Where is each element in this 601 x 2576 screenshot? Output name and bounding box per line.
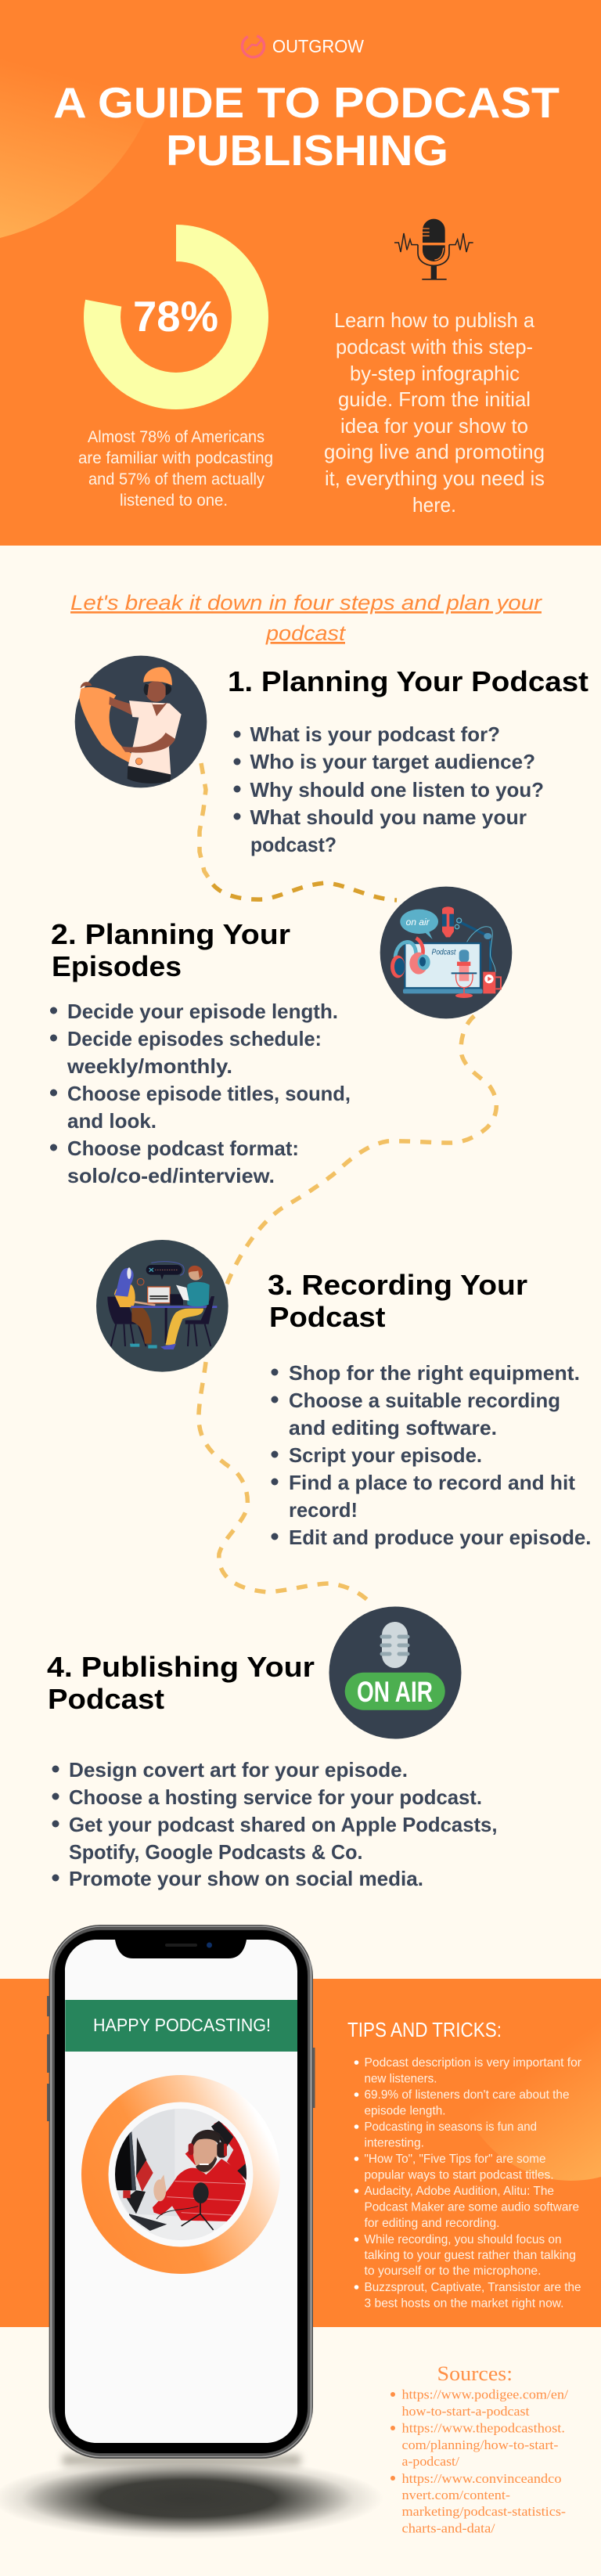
list: tips: Podcast Maker are some audio software bbox=[365, 2201, 579, 2214]
list: sources: how-to-start-a-podcast bbox=[402, 2404, 530, 2419]
list: tips: Podcasting in seasons is fun and bbox=[365, 2120, 537, 2134]
list: step 2: Choose episode titles, sound, bbox=[67, 1082, 351, 1105]
heading: step 4: Podcast bbox=[48, 1683, 164, 1715]
banner: happy podcasting: HAPPY PODCASTING! bbox=[93, 2015, 271, 2035]
banner: happy podcasting bbox=[65, 2000, 297, 2052]
donut caption: listened to one. bbox=[120, 492, 228, 510]
list: step 2: weekly/monthly. bbox=[67, 1054, 232, 1078]
logo: Outgrow: OUTGROW bbox=[272, 36, 364, 56]
list: step 4 bbox=[52, 1758, 498, 1890]
list: step 3 bbox=[271, 1361, 592, 1549]
list: sources: nvert.com/content- bbox=[402, 2488, 510, 2502]
title: PUBLISHING bbox=[166, 126, 448, 175]
list: step 2: and look. bbox=[67, 1109, 157, 1133]
heading: step 1: 1. Planning Your Podcast bbox=[228, 665, 588, 697]
donut caption: are familiar with podcasting bbox=[78, 449, 273, 467]
list: step 3: Shop for the right equipment. bbox=[289, 1361, 580, 1385]
heading: sources: Sources: bbox=[437, 2362, 513, 2385]
donut chart: 78% bbox=[102, 243, 250, 391]
list: step 3: Choose a suitable recording bbox=[289, 1389, 560, 1412]
list: tips: episode length. bbox=[365, 2104, 446, 2118]
heading: step 2: Episodes bbox=[52, 950, 182, 982]
list: step 4: Design covert art for your episode. bbox=[69, 1758, 408, 1782]
list: sources: marketing/podcast-statistics- bbox=[402, 2504, 566, 2519]
title bbox=[53, 78, 560, 175]
intro text: here. bbox=[412, 493, 456, 517]
heading: step 3: Podcast bbox=[269, 1301, 386, 1333]
panel: step 1 bbox=[75, 656, 588, 856]
heading: step 4: 4. Publishing Your bbox=[47, 1651, 315, 1683]
list: tips: "How To", "Five Tips for" are some bbox=[365, 2153, 546, 2166]
icon: microphone with sound waves bbox=[394, 219, 473, 280]
list: tips: While recording, you should focus on bbox=[365, 2233, 562, 2246]
logo: Outgrow bbox=[239, 32, 364, 60]
icon: podcast studio laptop: Podcast bbox=[432, 948, 456, 957]
icon: two people recording bbox=[96, 1240, 229, 1372]
list: step 1: podcast? bbox=[250, 833, 336, 856]
list: step 4: Choose a hosting service for your podcast. bbox=[69, 1785, 482, 1809]
panel: step 4 bbox=[47, 1606, 498, 1890]
list: step 1: Who is your target audience? bbox=[250, 750, 535, 773]
list: tips: for editing and recording. bbox=[365, 2217, 499, 2230]
list: step 3: and editing software. bbox=[289, 1416, 497, 1439]
list: step 2 bbox=[50, 1000, 351, 1187]
list: step 1: What should you name your bbox=[250, 805, 527, 829]
heading: step 2 bbox=[51, 918, 290, 982]
heading: tips and tricks: TIPS AND TRICKS: bbox=[347, 2018, 502, 2041]
icon: on air microphone: ON AIR bbox=[357, 1676, 433, 1708]
icon: podcast studio laptop bbox=[380, 887, 512, 1018]
list: tips: Audacity, Adobe Audition, Alitu: The bbox=[365, 2185, 554, 2198]
heading: step 2: 2. Planning Your bbox=[51, 918, 290, 950]
arrow: dashed path from step 1 to step 2 bbox=[200, 763, 397, 900]
donut chart: 78%: 78% bbox=[133, 292, 218, 340]
arrow: dashed path from step 2 to step 3 bbox=[225, 1016, 496, 1288]
list: step 3: Edit and produce your episode. bbox=[289, 1526, 592, 1549]
intro text: guide. From the initial bbox=[338, 387, 531, 411]
panel: tips band bbox=[0, 1952, 601, 2327]
icon: engineer with blueprint bbox=[75, 656, 207, 787]
list: step 1: Why should one listen to you? bbox=[250, 778, 544, 802]
phone side buttons bbox=[47, 1996, 315, 2121]
subtitle bbox=[70, 591, 542, 645]
intro text: going live and promoting bbox=[324, 440, 545, 463]
list: tips: Buzzsprout, Captivate, Transistor are the bbox=[365, 2281, 581, 2294]
list: sources: https://www.podigee.com/en/ bbox=[402, 2387, 568, 2401]
icon: on air microphone bbox=[329, 1606, 462, 1739]
heading: step 3 bbox=[268, 1269, 527, 1333]
arrow: dashed path from step 3 to step 4 bbox=[199, 1362, 370, 1602]
list: step 1: What is your podcast for? bbox=[250, 722, 500, 746]
list: step 3: Script your episode. bbox=[289, 1443, 482, 1467]
donut caption bbox=[78, 428, 273, 510]
phone frame bbox=[49, 1925, 313, 2459]
intro text bbox=[324, 308, 545, 517]
list: step 3: record! bbox=[289, 1498, 358, 1522]
list: tips: to yourself or to the microphone. bbox=[365, 2264, 542, 2278]
heading: step 4 bbox=[47, 1651, 315, 1715]
list: tips: talking to your guest rather than talking bbox=[365, 2249, 576, 2262]
list: step 1 bbox=[233, 722, 544, 856]
list: step 2: Choose podcast format: bbox=[67, 1137, 299, 1160]
photo: podcaster at microphone bbox=[112, 2106, 250, 2244]
intro text: it, everything you need is bbox=[325, 467, 545, 490]
list: step 2: Decide episodes schedule: bbox=[67, 1027, 322, 1050]
list: sources: https://www.convinceandco bbox=[402, 2471, 562, 2486]
list: step 4: Spotify, Google Podcasts & Co. bbox=[69, 1840, 363, 1864]
intro text: idea for your show to bbox=[340, 414, 528, 438]
list: sources bbox=[390, 2387, 568, 2536]
panel: header bbox=[0, 0, 601, 546]
intro text: Learn how to publish a bbox=[334, 308, 535, 332]
icon: podcast studio laptop: on air bbox=[406, 917, 430, 928]
list: tips: 69.9% of listeners don't care about the bbox=[365, 2088, 570, 2102]
list: tips: interesting. bbox=[365, 2137, 424, 2149]
list: tips bbox=[354, 2056, 582, 2311]
list: sources: charts-and-data/ bbox=[402, 2520, 495, 2536]
list: tips: popular ways to start podcast titles. bbox=[365, 2168, 554, 2182]
list: step 2: Decide your episode length. bbox=[67, 1000, 338, 1023]
list: tips: 3 best hosts on the market right now. bbox=[365, 2297, 563, 2311]
intro text: by-step infographic bbox=[350, 362, 520, 385]
subtitle: podcast bbox=[265, 621, 347, 645]
list: step 4: Get your podcast shared on Apple Podcasts, bbox=[69, 1813, 498, 1836]
phone mockup bbox=[47, 1925, 315, 2459]
list: sources: https://www.thepodcasthost. bbox=[402, 2420, 565, 2436]
title: A GUIDE TO PODCAST bbox=[53, 78, 560, 127]
phone ground shadow bbox=[0, 2455, 383, 2539]
panel: step 3 bbox=[96, 1240, 591, 1549]
list: step 2: solo/co-ed/interview. bbox=[67, 1164, 275, 1187]
gradient ring bbox=[81, 2075, 280, 2274]
subtitle: Let's break it down in four steps and plan your bbox=[70, 591, 542, 614]
panel: step 2 bbox=[50, 887, 512, 1187]
intro text: podcast with this step- bbox=[336, 335, 533, 358]
list: tips: new listeners. bbox=[365, 2073, 437, 2085]
phone screen bbox=[65, 1940, 297, 2443]
list: step 3: Find a place to record and hit bbox=[289, 1471, 575, 1494]
heading: step 3: 3. Recording Your bbox=[268, 1269, 527, 1301]
list: sources: com/planning/how-to-start- bbox=[402, 2437, 559, 2452]
donut caption: Almost 78% of Americans bbox=[88, 428, 265, 446]
sources bbox=[390, 2362, 568, 2536]
list: sources: a-podcast/ bbox=[402, 2454, 459, 2469]
list: tips: Podcast description is very important for bbox=[365, 2056, 582, 2070]
phone speaker and camera bbox=[165, 1943, 212, 1947]
donut caption: and 57% of them actually bbox=[88, 470, 265, 488]
list: step 4: Promote your show on social media. bbox=[69, 1867, 423, 1890]
